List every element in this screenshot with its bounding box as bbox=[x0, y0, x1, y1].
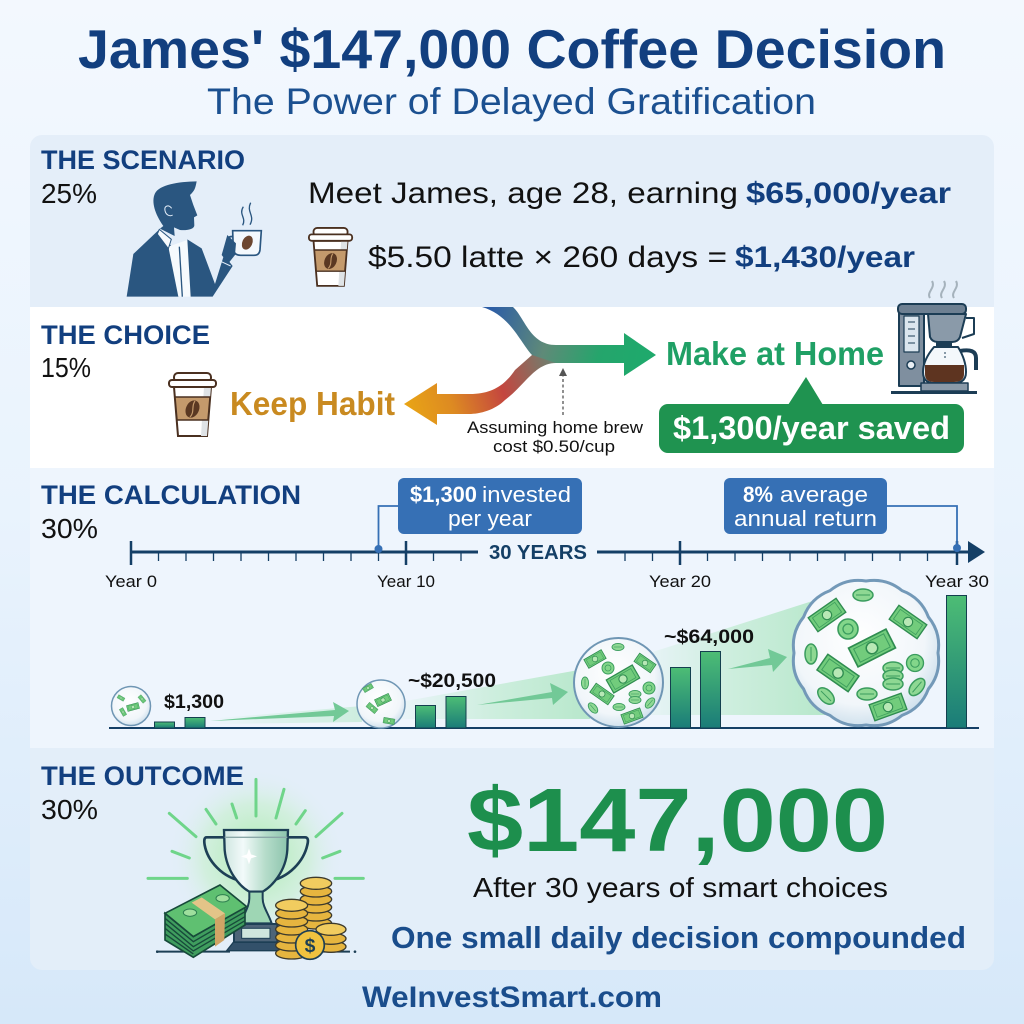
year labels: Year 0 bbox=[105, 572, 157, 591]
year labels: Year 10 bbox=[377, 572, 435, 591]
icon: takeaway cup bbox=[169, 373, 216, 436]
icon: man drinking coffee bbox=[127, 181, 261, 297]
bars: year 10 bbox=[416, 696, 466, 728]
snowball: start bbox=[112, 686, 150, 726]
callout: average return: 8% bbox=[743, 482, 773, 507]
panel: the choice bbox=[30, 281, 994, 468]
snowball: year 20 bbox=[574, 638, 663, 727]
choice weight: 15% bbox=[41, 352, 91, 383]
growth glow wedges bbox=[220, 597, 825, 724]
big outcome figure: $147,000 bbox=[467, 771, 888, 871]
outcome takeaway: One small daily decision compounded bbox=[391, 920, 966, 955]
scenario weight: 25% bbox=[41, 178, 97, 209]
footer website: WeInvestSmart.com bbox=[362, 981, 662, 1014]
scenario heading: THE SCENARIO bbox=[41, 145, 245, 175]
salary figure: $65,000/year bbox=[746, 177, 951, 210]
diverging arrows bbox=[404, 307, 656, 425]
callout: invested per year: per year bbox=[448, 506, 532, 531]
outcome weight: 30% bbox=[41, 794, 98, 825]
outcome heading: THE OUTCOME bbox=[41, 761, 244, 791]
value: 64000: ~$64,000 bbox=[664, 627, 754, 648]
panel: the scenario bbox=[30, 135, 994, 307]
growth arrow 3 bbox=[728, 649, 787, 672]
make at home label: Make at Home bbox=[666, 335, 884, 372]
panel: the calculation bbox=[30, 468, 994, 748]
title: James' $147,000 Coffee Decision bbox=[78, 18, 946, 80]
value: 1300: $1,300 bbox=[164, 692, 224, 713]
callout: invested per year: $1,300 bbox=[410, 482, 477, 507]
callout: average return bbox=[724, 478, 961, 552]
yearly latte cost: $1,430/year bbox=[735, 241, 915, 274]
calculation weight: 30% bbox=[41, 513, 98, 544]
year labels bbox=[105, 572, 989, 591]
timeline label: 30 YEARS bbox=[489, 542, 587, 564]
outcome caption: After 30 years of smart choices bbox=[473, 872, 888, 903]
growth chart baseline bbox=[109, 727, 979, 729]
icon: trophy with money: $ bbox=[305, 936, 316, 957]
assumption note: Assuming home brew bbox=[467, 418, 644, 437]
growth arrow 2 bbox=[477, 683, 568, 705]
scenario line 1: Meet James, age 28, earning bbox=[308, 177, 738, 210]
year labels: Year 20 bbox=[649, 572, 711, 591]
snowball: year 10 bbox=[357, 680, 405, 728]
callout: invested per year bbox=[374, 478, 582, 553]
dashed pointer bbox=[559, 368, 567, 415]
bar: year 30 bbox=[946, 596, 966, 728]
bars: start bbox=[154, 718, 205, 728]
callout: average return: average bbox=[780, 482, 868, 507]
timeline bbox=[105, 541, 989, 591]
snowball: year 30 bbox=[793, 580, 939, 726]
panel: the outcome bbox=[30, 748, 994, 970]
assumption note: cost $0.50/cup bbox=[493, 437, 615, 456]
assumption note bbox=[467, 418, 644, 456]
bars: year 20 bbox=[670, 652, 720, 728]
value: 20500: ~$20,500 bbox=[408, 671, 496, 692]
choice heading: THE CHOICE bbox=[41, 320, 210, 350]
callout: average return: annual return bbox=[734, 506, 877, 531]
subtitle: The Power of Delayed Gratification bbox=[207, 81, 816, 122]
savings callout: $1,300/year saved bbox=[673, 410, 950, 446]
callout: invested per year: invested bbox=[482, 482, 571, 507]
growth arrow 1 bbox=[210, 702, 349, 722]
icon: coffee maker bbox=[891, 281, 977, 392]
keep habit label: Keep Habit bbox=[230, 385, 395, 422]
savings callout bbox=[659, 377, 964, 453]
scenario line 2: $5.50 latte × 260 days = bbox=[368, 241, 727, 274]
year labels: Year 30 bbox=[925, 572, 989, 591]
icon: takeaway coffee cup bbox=[309, 228, 352, 286]
calculation heading: THE CALCULATION bbox=[41, 480, 301, 510]
icon: trophy with money bbox=[148, 768, 363, 959]
